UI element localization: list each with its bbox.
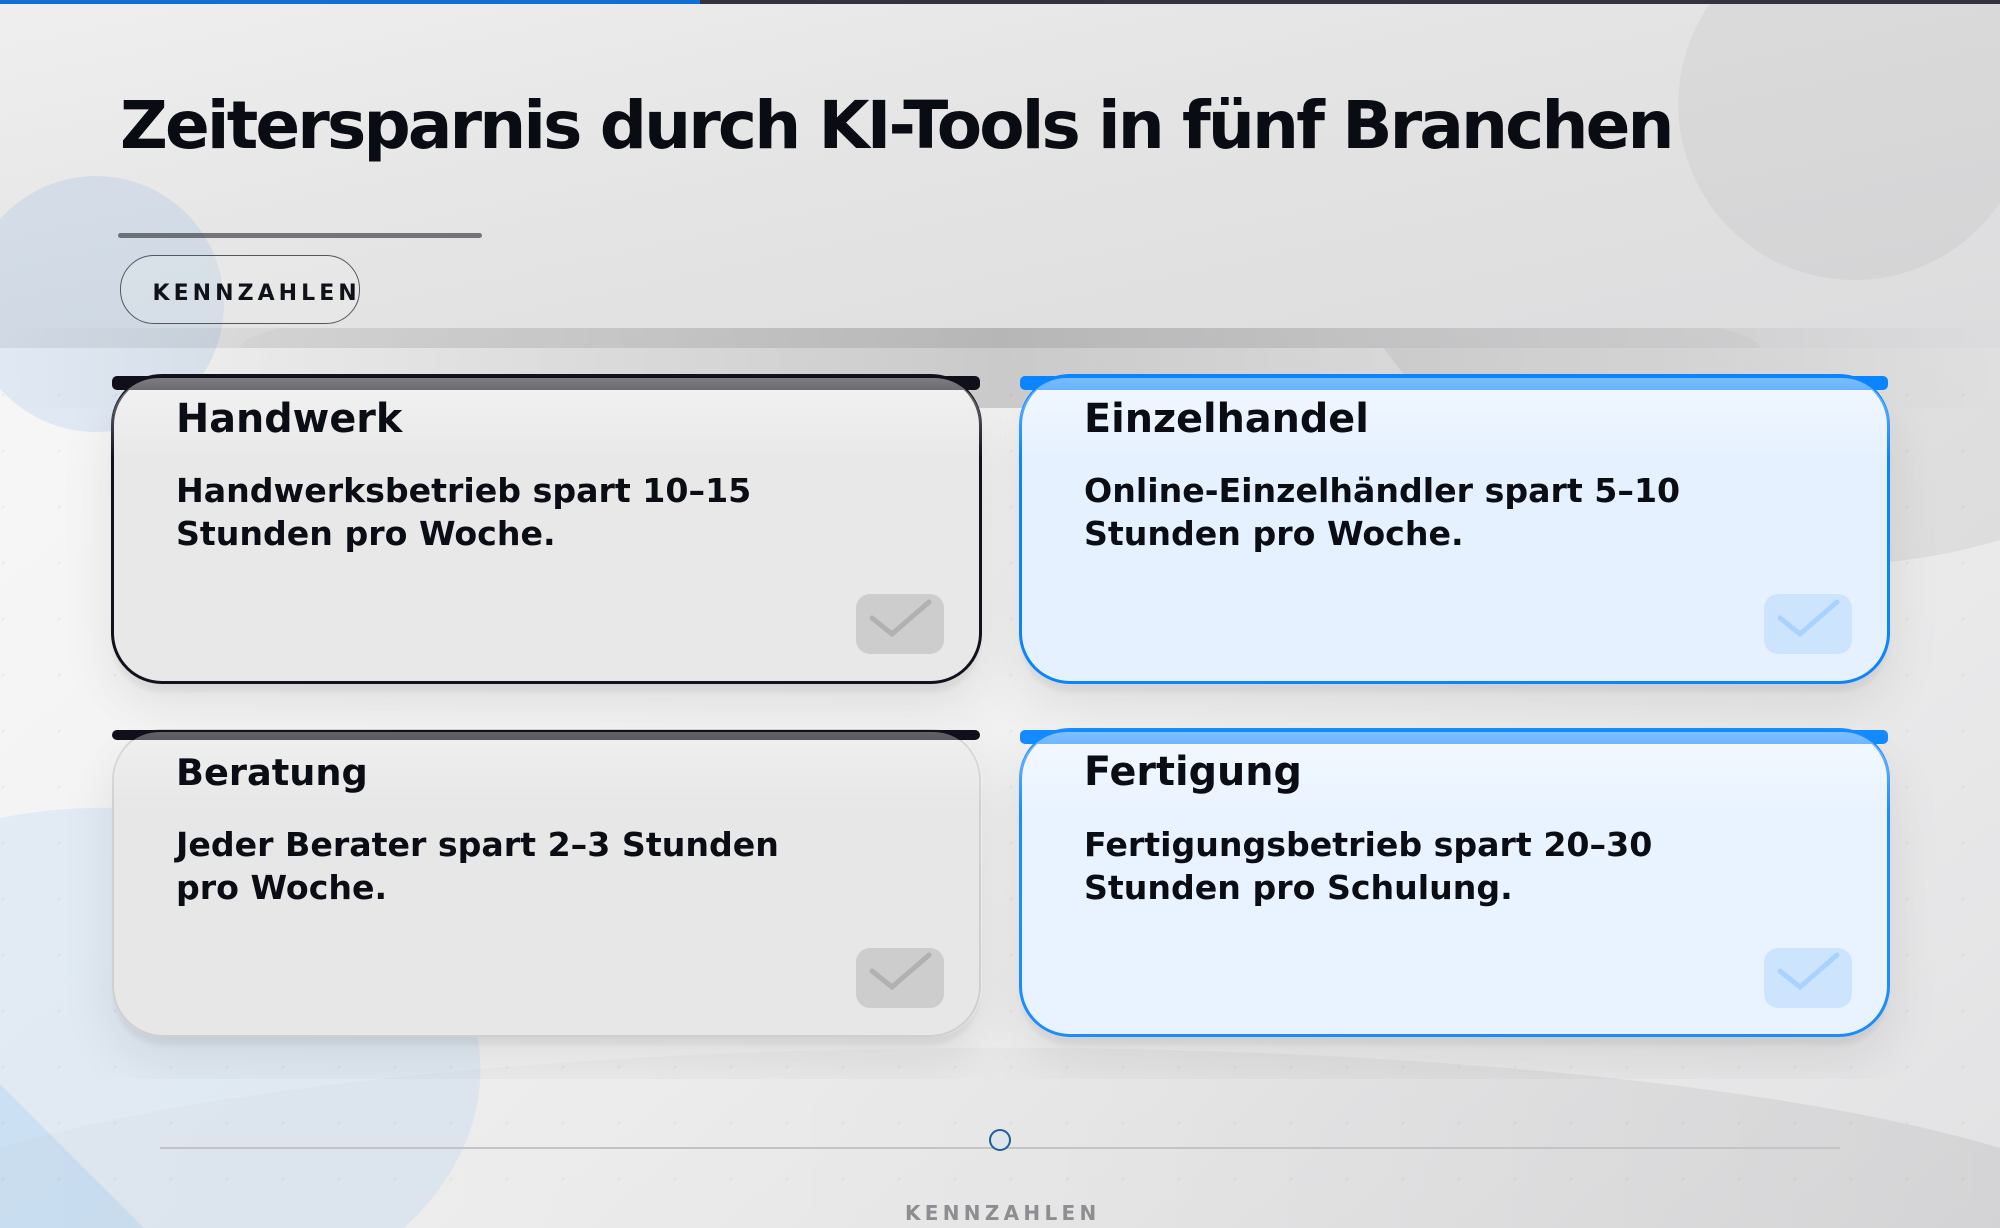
text: Fertigung: Stunden pro Schulung. bbox=[1084, 868, 1513, 907]
panel: Fertigung bbox=[1019, 728, 1890, 1044]
header band bbox=[0, 0, 2000, 348]
pill label: KENNZAHLEN bbox=[152, 280, 361, 306]
pill badge bbox=[120, 255, 360, 324]
heading: Fertigung: Fertigung bbox=[1084, 749, 1302, 795]
text: Handwerk: Stunden pro Woche. bbox=[176, 514, 556, 553]
text: Fertigung: Fertigungsbetrieb spart 20–30 bbox=[1084, 824, 1652, 864]
heading: Handwerk: Handwerk bbox=[176, 396, 402, 442]
header shadow lens bbox=[0, 328, 2000, 348]
heading: Einzelhandel: Einzelhandel bbox=[1084, 396, 1369, 442]
text: Einzelhandel: Online-Einzelhändler spart 5–10 bbox=[1084, 470, 1680, 510]
text: Handwerk bbox=[176, 470, 751, 553]
card shadows row 1 bbox=[106, 428, 1896, 712]
header decorative circles bbox=[0, 4, 2000, 432]
footer label: KENNZAHLEN bbox=[905, 1201, 1100, 1225]
top accent bar bbox=[0, 0, 2000, 4]
panel: Handwerk bbox=[111, 374, 982, 691]
text: Beratung: Jeder Berater spart 2–3 Stunden bbox=[176, 824, 779, 864]
text: Einzelhandel: Stunden pro Woche. bbox=[1084, 514, 1464, 553]
heading: Beratung: Beratung bbox=[176, 750, 368, 794]
text: Handwerk: Handwerksbetrieb spart 10–15 bbox=[176, 470, 751, 510]
icon: check bbox=[1764, 594, 1852, 654]
title: Zeitersparnis durch KI-Tools in fünf Branchen bbox=[120, 87, 1672, 164]
footer divider bbox=[160, 1147, 1840, 1149]
icon: check bbox=[856, 948, 944, 1008]
text: Fertigung bbox=[1084, 824, 1652, 907]
panel: Einzelhandel bbox=[1019, 374, 1890, 690]
card shadows row 2 bbox=[106, 783, 1896, 1066]
footer marker bbox=[989, 1129, 1011, 1151]
title rule bbox=[118, 233, 482, 238]
header shadow band bbox=[0, 328, 2000, 408]
panel: Beratung bbox=[112, 729, 981, 1044]
icon: check bbox=[856, 594, 944, 654]
icon: check bbox=[1764, 948, 1852, 1008]
text: Beratung: pro Woche. bbox=[176, 868, 387, 907]
text: Einzelhandel bbox=[1084, 470, 1680, 553]
text: Beratung bbox=[174, 824, 779, 907]
